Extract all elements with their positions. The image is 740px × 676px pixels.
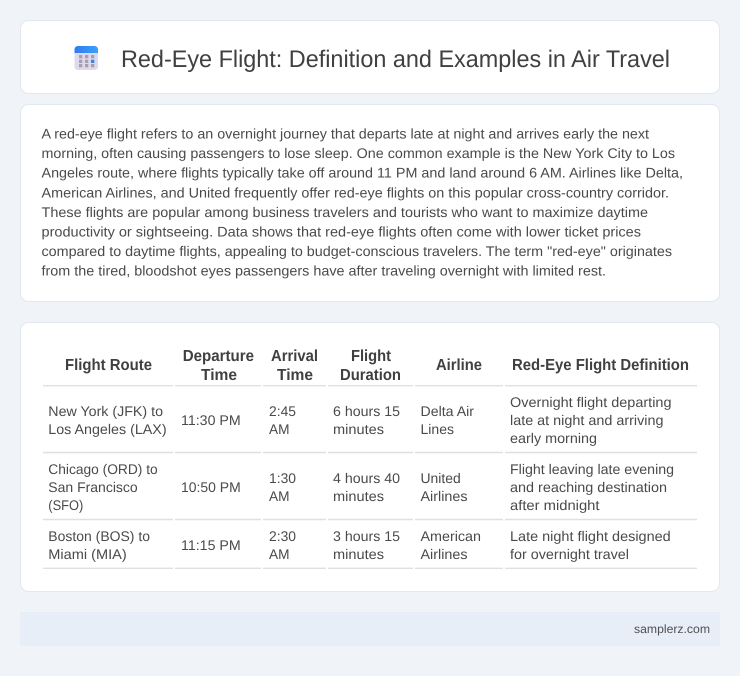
table row: New York to Los Angeles [48, 394, 672, 446]
table row: New York to Los Angeles: 11:30 PM [181, 412, 241, 428]
panel: description [20, 104, 720, 302]
table row: Boston to Miami: 3 hours 15 [333, 528, 400, 544]
table row: Boston to Miami: Airlines [420, 546, 468, 562]
table header row: Flight Route [65, 357, 152, 374]
text block: description paragraph [42, 126, 683, 279]
table row: New York to Los Angeles: 2:45 [269, 403, 296, 419]
table row: Chicago to San Francisco: United [420, 470, 461, 486]
text block: description paragraph: American Airlines, and United frequently offer red-eye flights on this popular cross-country corridor. [42, 184, 669, 200]
table row: New York to Los Angeles: 6 hours 15 [333, 403, 400, 419]
table header row: Duration [340, 367, 401, 384]
table header row: Departure [183, 348, 254, 365]
table row: Boston to Miami: minutes [333, 546, 384, 562]
table row: Boston to Miami [48, 528, 671, 562]
table row: Chicago to San Francisco [48, 461, 674, 513]
icon: calendar [74, 46, 98, 70]
table header row: Red-Eye Flight Definition [512, 357, 689, 374]
table row: Chicago to San Francisco: minutes [333, 488, 384, 504]
table row: Chicago to San Francisco: after midnight [510, 497, 600, 513]
table row: Boston to Miami: for overnight travel [510, 546, 629, 562]
table row: New York to Los Angeles: early morning [510, 430, 597, 446]
table row: Boston to Miami: Miami (MIA) [48, 546, 127, 562]
text block: description paragraph: Angeles route, where flights typically take off around 11 PM and land around 6 AM. Airlines like Delta, [42, 165, 683, 181]
table header row: Arrival [271, 348, 318, 365]
table row: Chicago to San Francisco: and reaching destination [510, 479, 667, 495]
table row: Chicago to San Francisco: Airlines [420, 488, 468, 504]
table row: Chicago to San Francisco: 10:50 PM [181, 479, 241, 495]
table row: Boston to Miami: AM [269, 546, 290, 562]
footer [20, 612, 720, 646]
text block: description paragraph: from the tired, bloodshot eyes passengers have after traveling overnight with limited rest. [42, 263, 606, 279]
text block: description paragraph: morning, often causing passengers to lose sleep. One common example is the New York City to Los [42, 145, 675, 161]
table row: Chicago to San Francisco: 1:30 [269, 470, 296, 486]
table row: New York to Los Angeles: late at night and arriving [510, 412, 664, 428]
table row: New York to Los Angeles: minutes [333, 421, 384, 437]
table header row [65, 348, 689, 384]
table row: Boston to Miami: 11:15 PM [181, 537, 241, 553]
table row: Chicago to San Francisco: AM [269, 488, 290, 504]
table row: Boston to Miami: Late night flight designed [510, 528, 671, 544]
table row: New York to Los Angeles: Los Angeles (LAX) [48, 421, 167, 437]
table header row: Time [201, 367, 237, 384]
footer text: samplerz.com: samplerz.com [634, 622, 710, 636]
table row: Chicago to San Francisco: Chicago (ORD) to [48, 461, 158, 477]
table header row: Airline [436, 357, 482, 374]
table row: Boston to Miami: 2:30 [269, 528, 296, 544]
text block: description paragraph: A red-eye flight refers to an overnight journey that departs late at night and arrives early the next [42, 126, 649, 142]
panel: title header [20, 20, 720, 94]
table row: New York to Los Angeles: New York (JFK) to [48, 403, 163, 419]
table row: New York to Los Angeles: AM [269, 421, 290, 437]
table row: Boston to Miami: Boston (BOS) to [48, 528, 150, 544]
table row: New York to Los Angeles: Overnight flight departing [510, 394, 672, 410]
table row: Boston to Miami: American [420, 528, 481, 544]
table row: Chicago to San Francisco: San Francisco [48, 479, 138, 495]
table row: Chicago to San Francisco: (SFO) [48, 497, 83, 513]
text block: description paragraph: productivity or sightseeing. Data shows that red-eye flights often come with lower ticket prices [42, 224, 641, 240]
title: Red-Eye Flight: Definition and Examples in Air Travel [121, 46, 670, 73]
table header row: Flight [351, 348, 392, 365]
table row: New York to Los Angeles: Lines [420, 421, 454, 437]
table header row: Time [277, 367, 313, 384]
table row: Chicago to San Francisco: Flight leaving late evening [510, 461, 674, 477]
text block: description paragraph: compared to daytime flights, appealing to budget-conscious travelers. The term "red-eye" originates [42, 243, 672, 259]
table row: Chicago to San Francisco: 4 hours 40 [333, 470, 400, 486]
table row: New York to Los Angeles: Delta Air [420, 403, 474, 419]
text block: description paragraph: These flights are popular among business travelers and tourists who want to maximize daytime [42, 204, 648, 220]
panel: flight table [20, 322, 720, 592]
